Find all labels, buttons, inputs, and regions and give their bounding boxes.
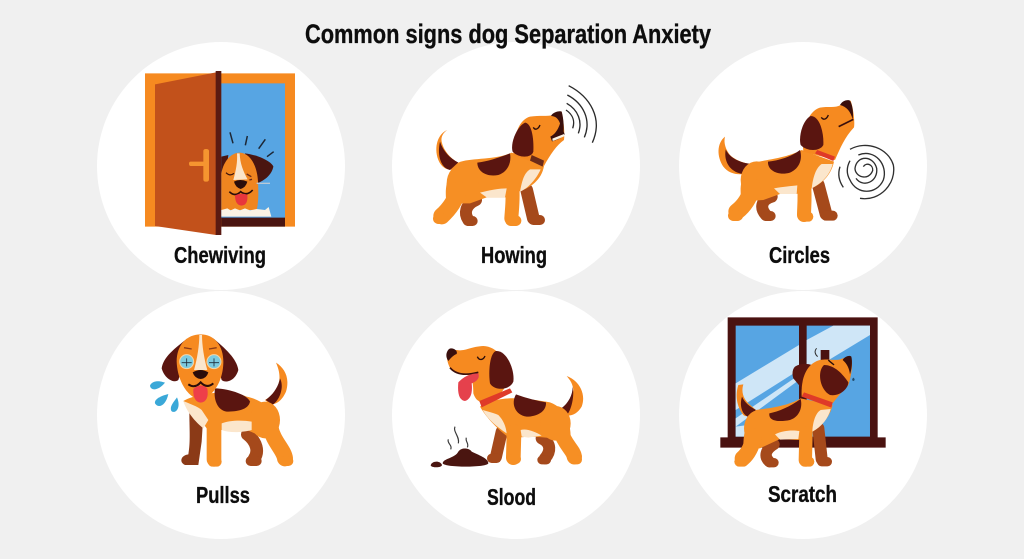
- icon: dog peeking through door: [145, 71, 295, 235]
- icon: dog with spiral circles: [719, 100, 894, 217]
- icon: dog scratching at window: [720, 317, 886, 463]
- label: Howing: Howing: [481, 242, 547, 268]
- circle: pulls background: [97, 291, 345, 539]
- icon: panting dog with sweat drops: [150, 334, 288, 465]
- icon: howling dog with sound waves: [436, 86, 596, 221]
- circle: howling background: [392, 42, 640, 290]
- circle: slood background: [392, 291, 640, 539]
- circle: chewing background: [97, 42, 345, 290]
- label: Circles: Circles: [769, 242, 830, 268]
- label: Chewiving: Chewiving: [174, 242, 266, 268]
- circle: scratch background: [679, 291, 927, 539]
- icon: drooling dog with poop pile: [431, 346, 583, 467]
- label: Slood: Slood: [487, 484, 536, 510]
- circle: circling background: [679, 42, 927, 290]
- label: Scratch: Scratch: [768, 481, 837, 507]
- label: Pullss: Pullss: [196, 482, 250, 508]
- title: Common signs dog Separation Anxiety: [305, 19, 711, 49]
